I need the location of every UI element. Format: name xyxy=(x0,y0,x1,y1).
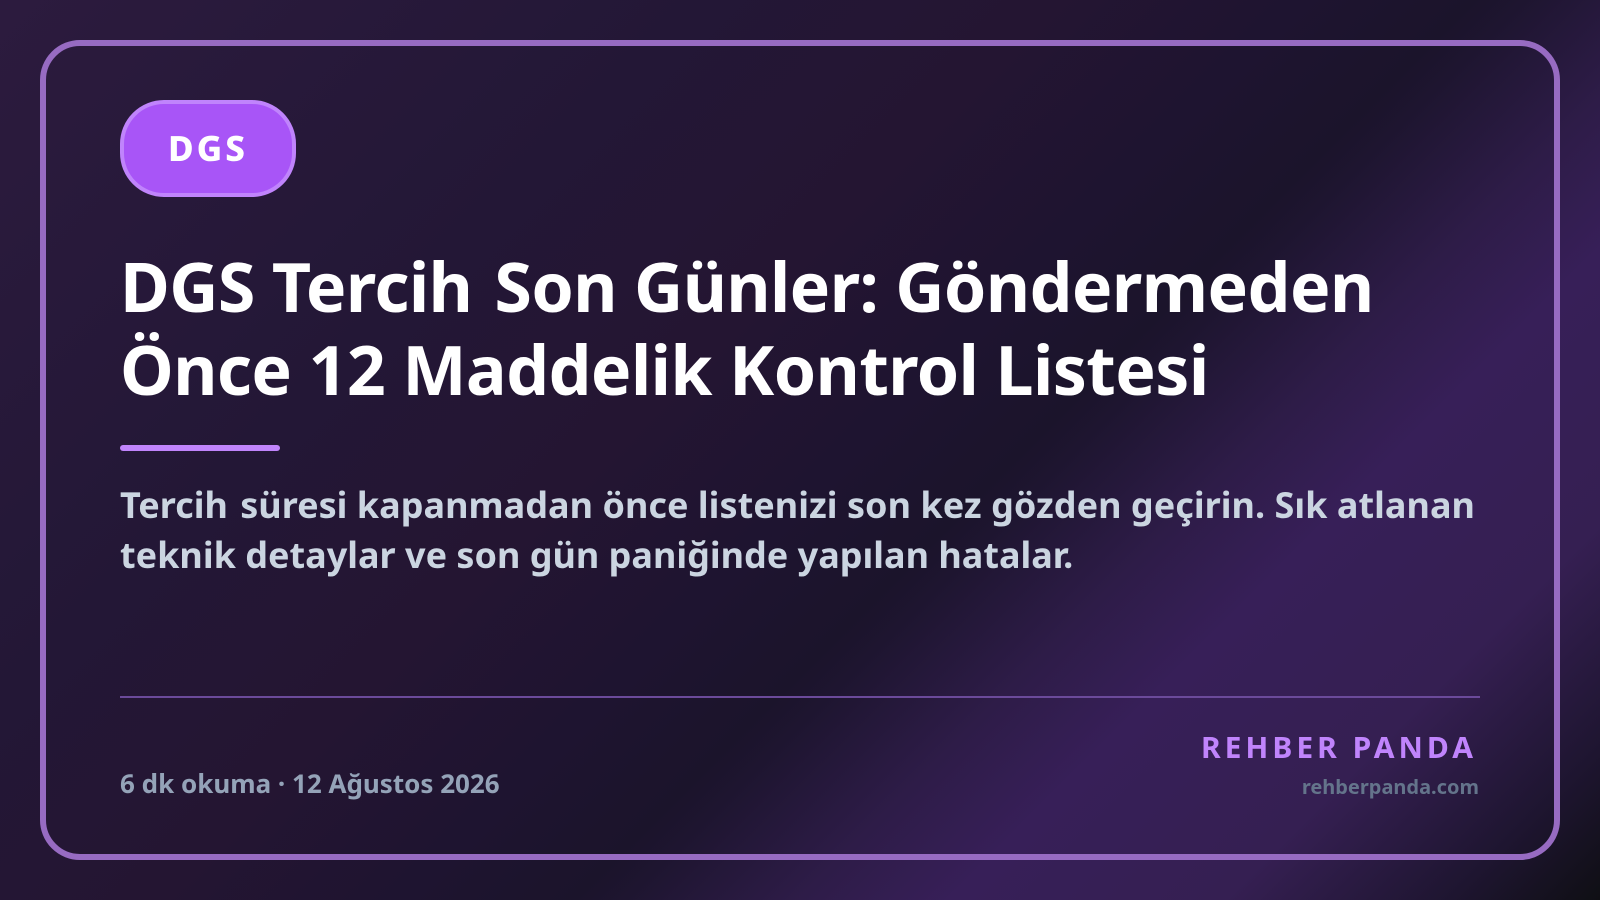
title xyxy=(120,239,1374,415)
brand name: REHBER PANDA xyxy=(1201,726,1477,767)
reading time and date: 6 dk okuma · 12 Ağustos 2026 xyxy=(120,765,500,801)
category badge: DGS xyxy=(168,125,248,172)
title: DGS Tercih Son Günler: Göndermeden xyxy=(120,239,1374,332)
footer divider xyxy=(120,696,1480,698)
subtitle: teknik detaylar ve son gün paniğinde yapılan hatalar. xyxy=(120,530,1073,579)
category badge xyxy=(120,100,296,197)
subtitle: Tercih süresi kapanmadan önce listenizi son kez gözden geçirin. Sık atlanan xyxy=(120,480,1475,529)
subtitle xyxy=(120,480,1475,579)
title: Önce 12 Maddelik Kontrol Listesi xyxy=(120,322,1209,415)
brand url: rehberpanda.com xyxy=(1302,773,1479,800)
accent rule xyxy=(120,445,280,451)
